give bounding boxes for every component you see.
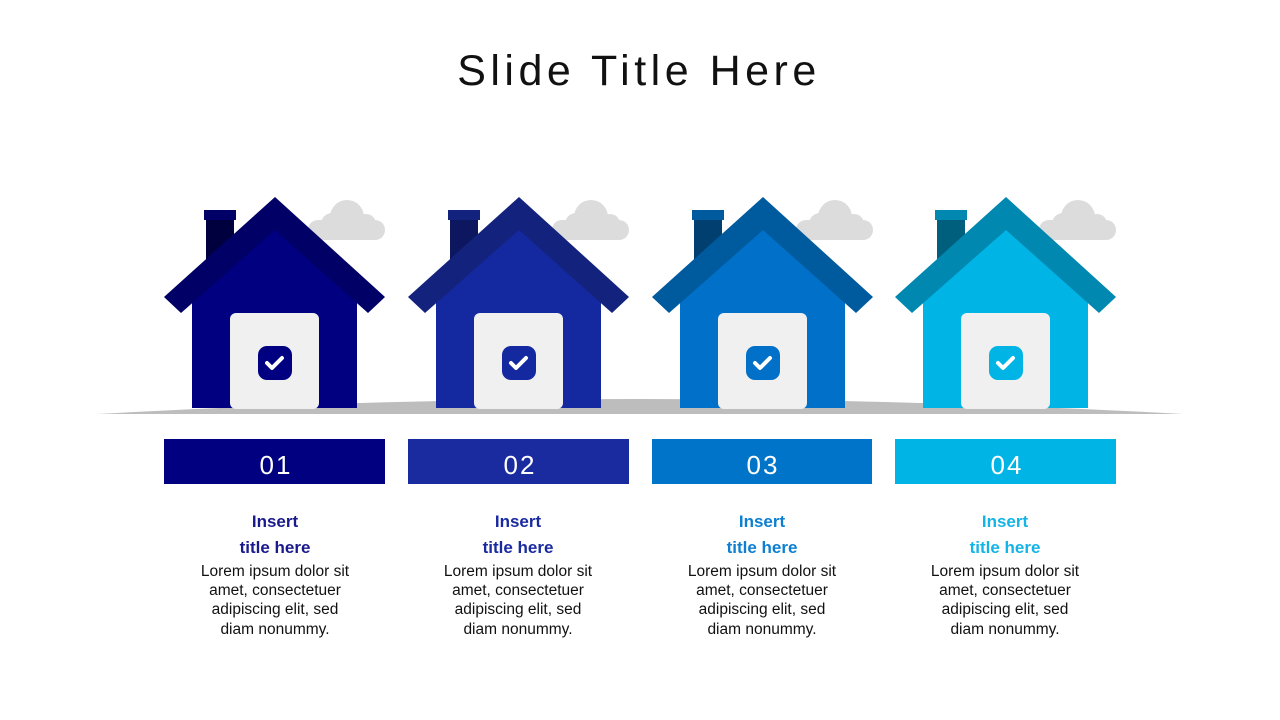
step texts: Lorem ipsum dolor sit [201,563,350,580]
step texts: adipiscing elit, sed [455,601,581,618]
step texts: title here [970,538,1040,557]
title: Slide Title Here [457,47,821,95]
step texts: diam nonummy. [950,621,1060,638]
step texts: Insert [495,512,541,531]
house 2 [408,197,629,409]
step texts: Insert [252,512,298,531]
step texts [201,512,1080,638]
step texts: title here [240,538,310,557]
number bars: 02 [504,450,536,480]
number bars [164,439,1116,484]
step texts: adipiscing elit, sed [942,601,1068,618]
step texts: amet, consectetuer [209,582,341,599]
ground [97,399,1183,414]
number bars: 01 [260,450,292,480]
house 4 [895,197,1116,409]
step texts: diam nonummy. [463,621,573,638]
step texts: diam nonummy. [220,621,330,638]
house 1 [164,197,385,409]
step texts: title here [727,538,797,557]
step texts: Lorem ipsum dolor sit [931,563,1080,580]
house 3 [652,197,873,409]
step texts: adipiscing elit, sed [699,601,825,618]
step texts: Lorem ipsum dolor sit [688,563,837,580]
number bars: 04 [991,450,1023,480]
step texts: amet, consectetuer [939,582,1071,599]
step texts: adipiscing elit, sed [212,601,338,618]
step texts: title here [483,538,553,557]
step texts: Lorem ipsum dolor sit [444,563,593,580]
step texts: diam nonummy. [707,621,817,638]
step texts: amet, consectetuer [696,582,828,599]
number bars: 03 [747,450,779,480]
step texts: amet, consectetuer [452,582,584,599]
step texts: Insert [982,512,1028,531]
step texts: Insert [739,512,785,531]
